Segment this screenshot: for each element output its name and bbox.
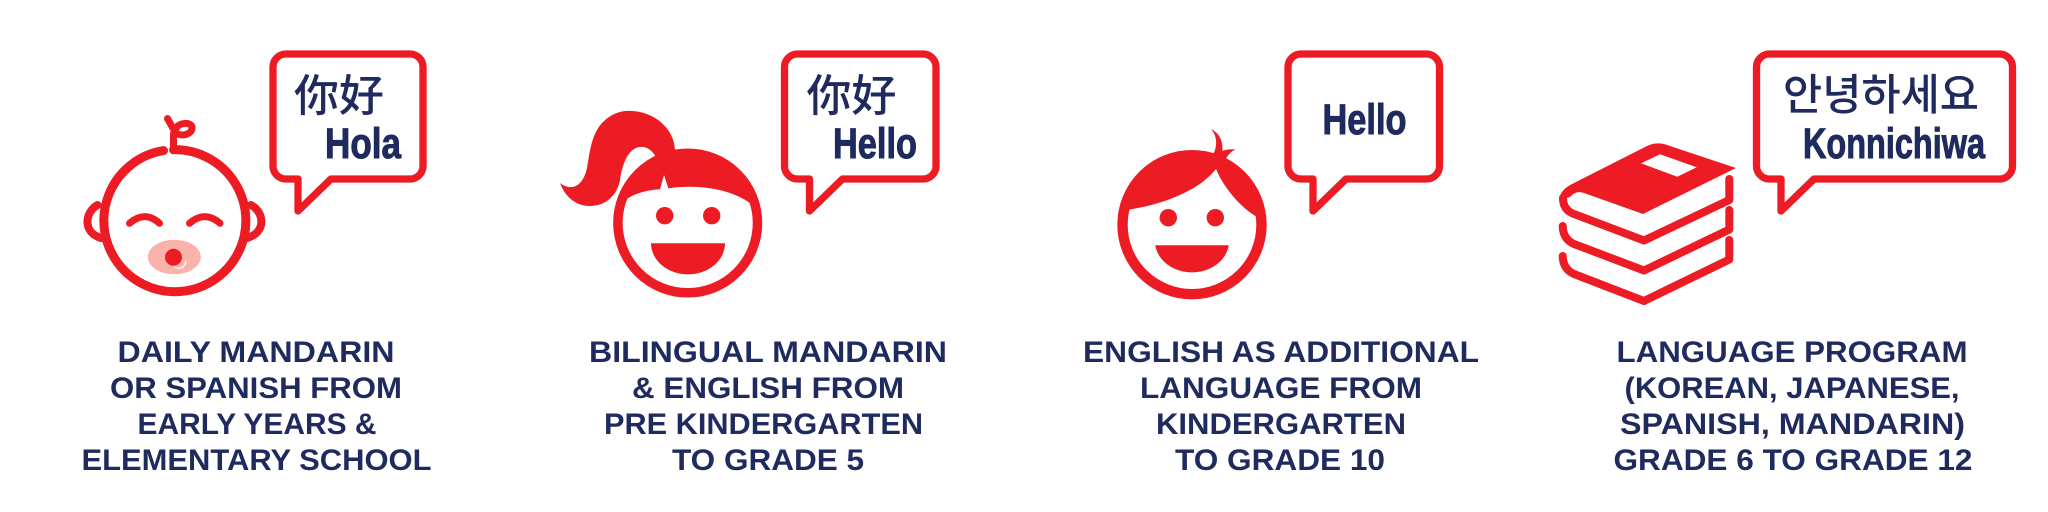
icon: baby face — [87, 118, 261, 292]
caption: English as additional language — [1083, 336, 1479, 477]
speech bubble: Chinese and Hello: Hello — [833, 120, 917, 168]
caption: English as additional language: KINDERGARTEN — [1156, 408, 1406, 441]
speech bubble: Chinese and Hello: 你好 — [806, 72, 896, 121]
icon: boy face — [1122, 129, 1262, 294]
caption: English as additional language: LANGUAGE FROM — [1140, 372, 1422, 405]
caption: bilingual Mandarin — [589, 336, 947, 477]
speech bubble: Korean and Konnichiwa: 안녕하세요 — [1783, 72, 1979, 120]
speech bubble: Hello — [1288, 54, 1440, 211]
panel: daily Mandarin or Spanish — [82, 54, 432, 477]
icon: stack of books — [1559, 143, 1736, 301]
panel: English as additional language — [1083, 54, 1479, 477]
speech bubble: Chinese and Hola — [273, 54, 423, 211]
caption: bilingual Mandarin: & ENGLISH FROM — [632, 372, 904, 405]
caption: bilingual Mandarin: BILINGUAL MANDARIN — [589, 336, 947, 369]
icon: girl face with ponytail — [560, 111, 758, 293]
caption: language program: LANGUAGE PROGRAM — [1616, 336, 1968, 369]
speech bubble: Korean and Konnichiwa: Konnichiwa — [1803, 120, 1986, 168]
caption: language program: (KOREAN, JAPANESE, — [1624, 372, 1960, 405]
caption: language program — [1614, 336, 1972, 477]
speech bubble: Chinese and Hola: 你好 — [294, 72, 384, 121]
caption: daily Mandarin: DAILY MANDARIN — [118, 336, 394, 369]
caption: language program: GRADE 6 TO GRADE 12 — [1614, 444, 1972, 477]
panel: language program — [1559, 54, 2012, 477]
caption: language program: SPANISH, MANDARIN) — [1620, 408, 1965, 441]
speech bubble: Chinese and Hola: Hola — [325, 120, 402, 168]
caption: daily Mandarin: EARLY YEARS & — [138, 408, 376, 441]
speech bubble: Chinese and Hello — [784, 54, 936, 211]
caption: daily Mandarin: ELEMENTARY SCHOOL — [82, 444, 432, 477]
speech bubble: Korean and Konnichiwa — [1756, 54, 2012, 211]
caption: daily Mandarin: OR SPANISH FROM — [110, 372, 402, 405]
speech bubble: Hello: Hello — [1322, 96, 1406, 144]
caption: English as additional language: ENGLISH AS ADDITIONAL — [1083, 336, 1479, 369]
caption: daily Mandarin — [82, 336, 432, 477]
panel: bilingual Mandarin and English — [560, 54, 947, 477]
caption: English as additional language: TO GRADE 10 — [1175, 444, 1385, 477]
caption: bilingual Mandarin: PRE KINDERGARTEN — [604, 408, 923, 441]
caption: bilingual Mandarin: TO GRADE 5 — [672, 444, 864, 477]
